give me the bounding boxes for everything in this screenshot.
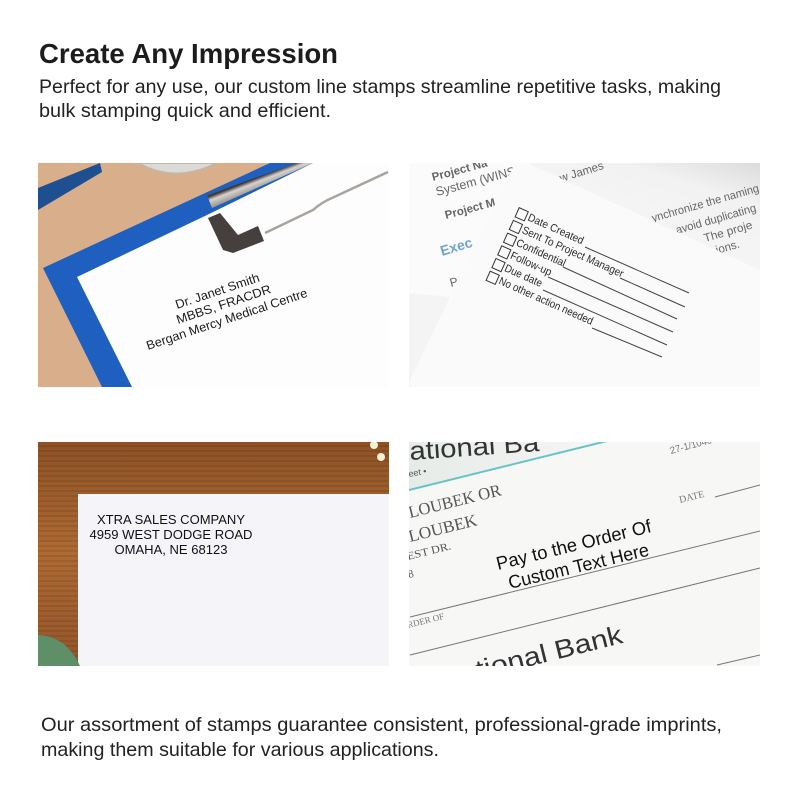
panel: bank cheque [409,442,760,666]
bank name: ational Ba [408,427,541,466]
panel: address stamp on clipboard [38,163,389,387]
closing text: making them suitable for various applications. [41,739,439,761]
stamped text: Pay to the Order Of [494,515,654,574]
envelope [78,494,389,666]
account holder [409,486,502,578]
icon: wire handle [265,172,388,233]
stamped text: Custom Text Here [506,539,651,593]
stamped checklist: Sent To Project Manager [520,224,626,280]
background document: System (WINS [434,164,517,199]
stamped checklist [486,208,689,357]
stamped address: Dr. Janet Smith [174,271,261,312]
closing text: Our assortment of stamps guarantee consistent, professional-grade imprints, [41,714,722,736]
background document: P [448,274,460,290]
closing text [41,714,722,761]
paper sheet [77,163,389,387]
account holder: EST DR. [406,540,453,563]
stamped address: MBBS, FRACDR [175,282,273,327]
background document: Project M [444,197,497,222]
cheque lines [410,485,760,665]
background document: w James [557,160,606,185]
intro text: Perfect for any use, our custom line stamps streamline repetitive tasks, making [39,76,721,98]
account holder: 8 [407,568,416,581]
cheque details [406,435,714,630]
account holder: LOUBEK [406,510,480,546]
icon: clip grip [208,213,264,253]
background document: Exec [438,234,474,259]
cheque details: 27-1/1040 [669,435,714,457]
cheque header band [409,442,520,489]
stamped address [90,512,252,557]
icon: flowers [370,441,385,461]
title: Create Any Impression [39,38,338,69]
background document [432,163,760,287]
background document: The proje [703,220,754,245]
stamped address: 4959 WEST DODGE ROAD [90,527,252,542]
panel: bank cheque: eet • [408,466,427,479]
account holder: LOUBEK OR [406,480,504,522]
icon: silver ring [138,163,217,174]
icon: blue pen [38,163,102,210]
front sheet [494,168,722,254]
background document: avoid duplicating [675,202,758,237]
stamped checklist: No other action needed [497,275,595,328]
stamped checklist: Due date [503,263,544,290]
clipboard board [43,163,313,387]
intro text: bulk stamping quick and efficient. [39,100,331,122]
stamped address: XTRA SALES COMPANY [97,512,245,527]
background document: ynchronize the naming [651,183,761,225]
intro text [39,76,721,122]
icon: metal clip [207,163,313,208]
stamped address: Bergan Mercy Medical Centre [145,286,309,353]
stamped address: OMAHA, NE 68123 [114,542,228,557]
cheque details: RDER OF [406,611,445,630]
background document: Project Na [431,157,489,184]
panel: checklist stamp on paper [409,157,761,387]
background document: ions. [715,239,741,257]
stamped checklist: Follow-up [508,250,553,279]
stamped checklist: Date Created [526,212,585,247]
cheque details: DATE [678,489,706,506]
panel: envelope on wood table [38,441,389,666]
icon: leaf [38,635,80,666]
bank name lower: ational Bank [456,619,627,689]
stamped checklist: Confidential [514,237,567,270]
